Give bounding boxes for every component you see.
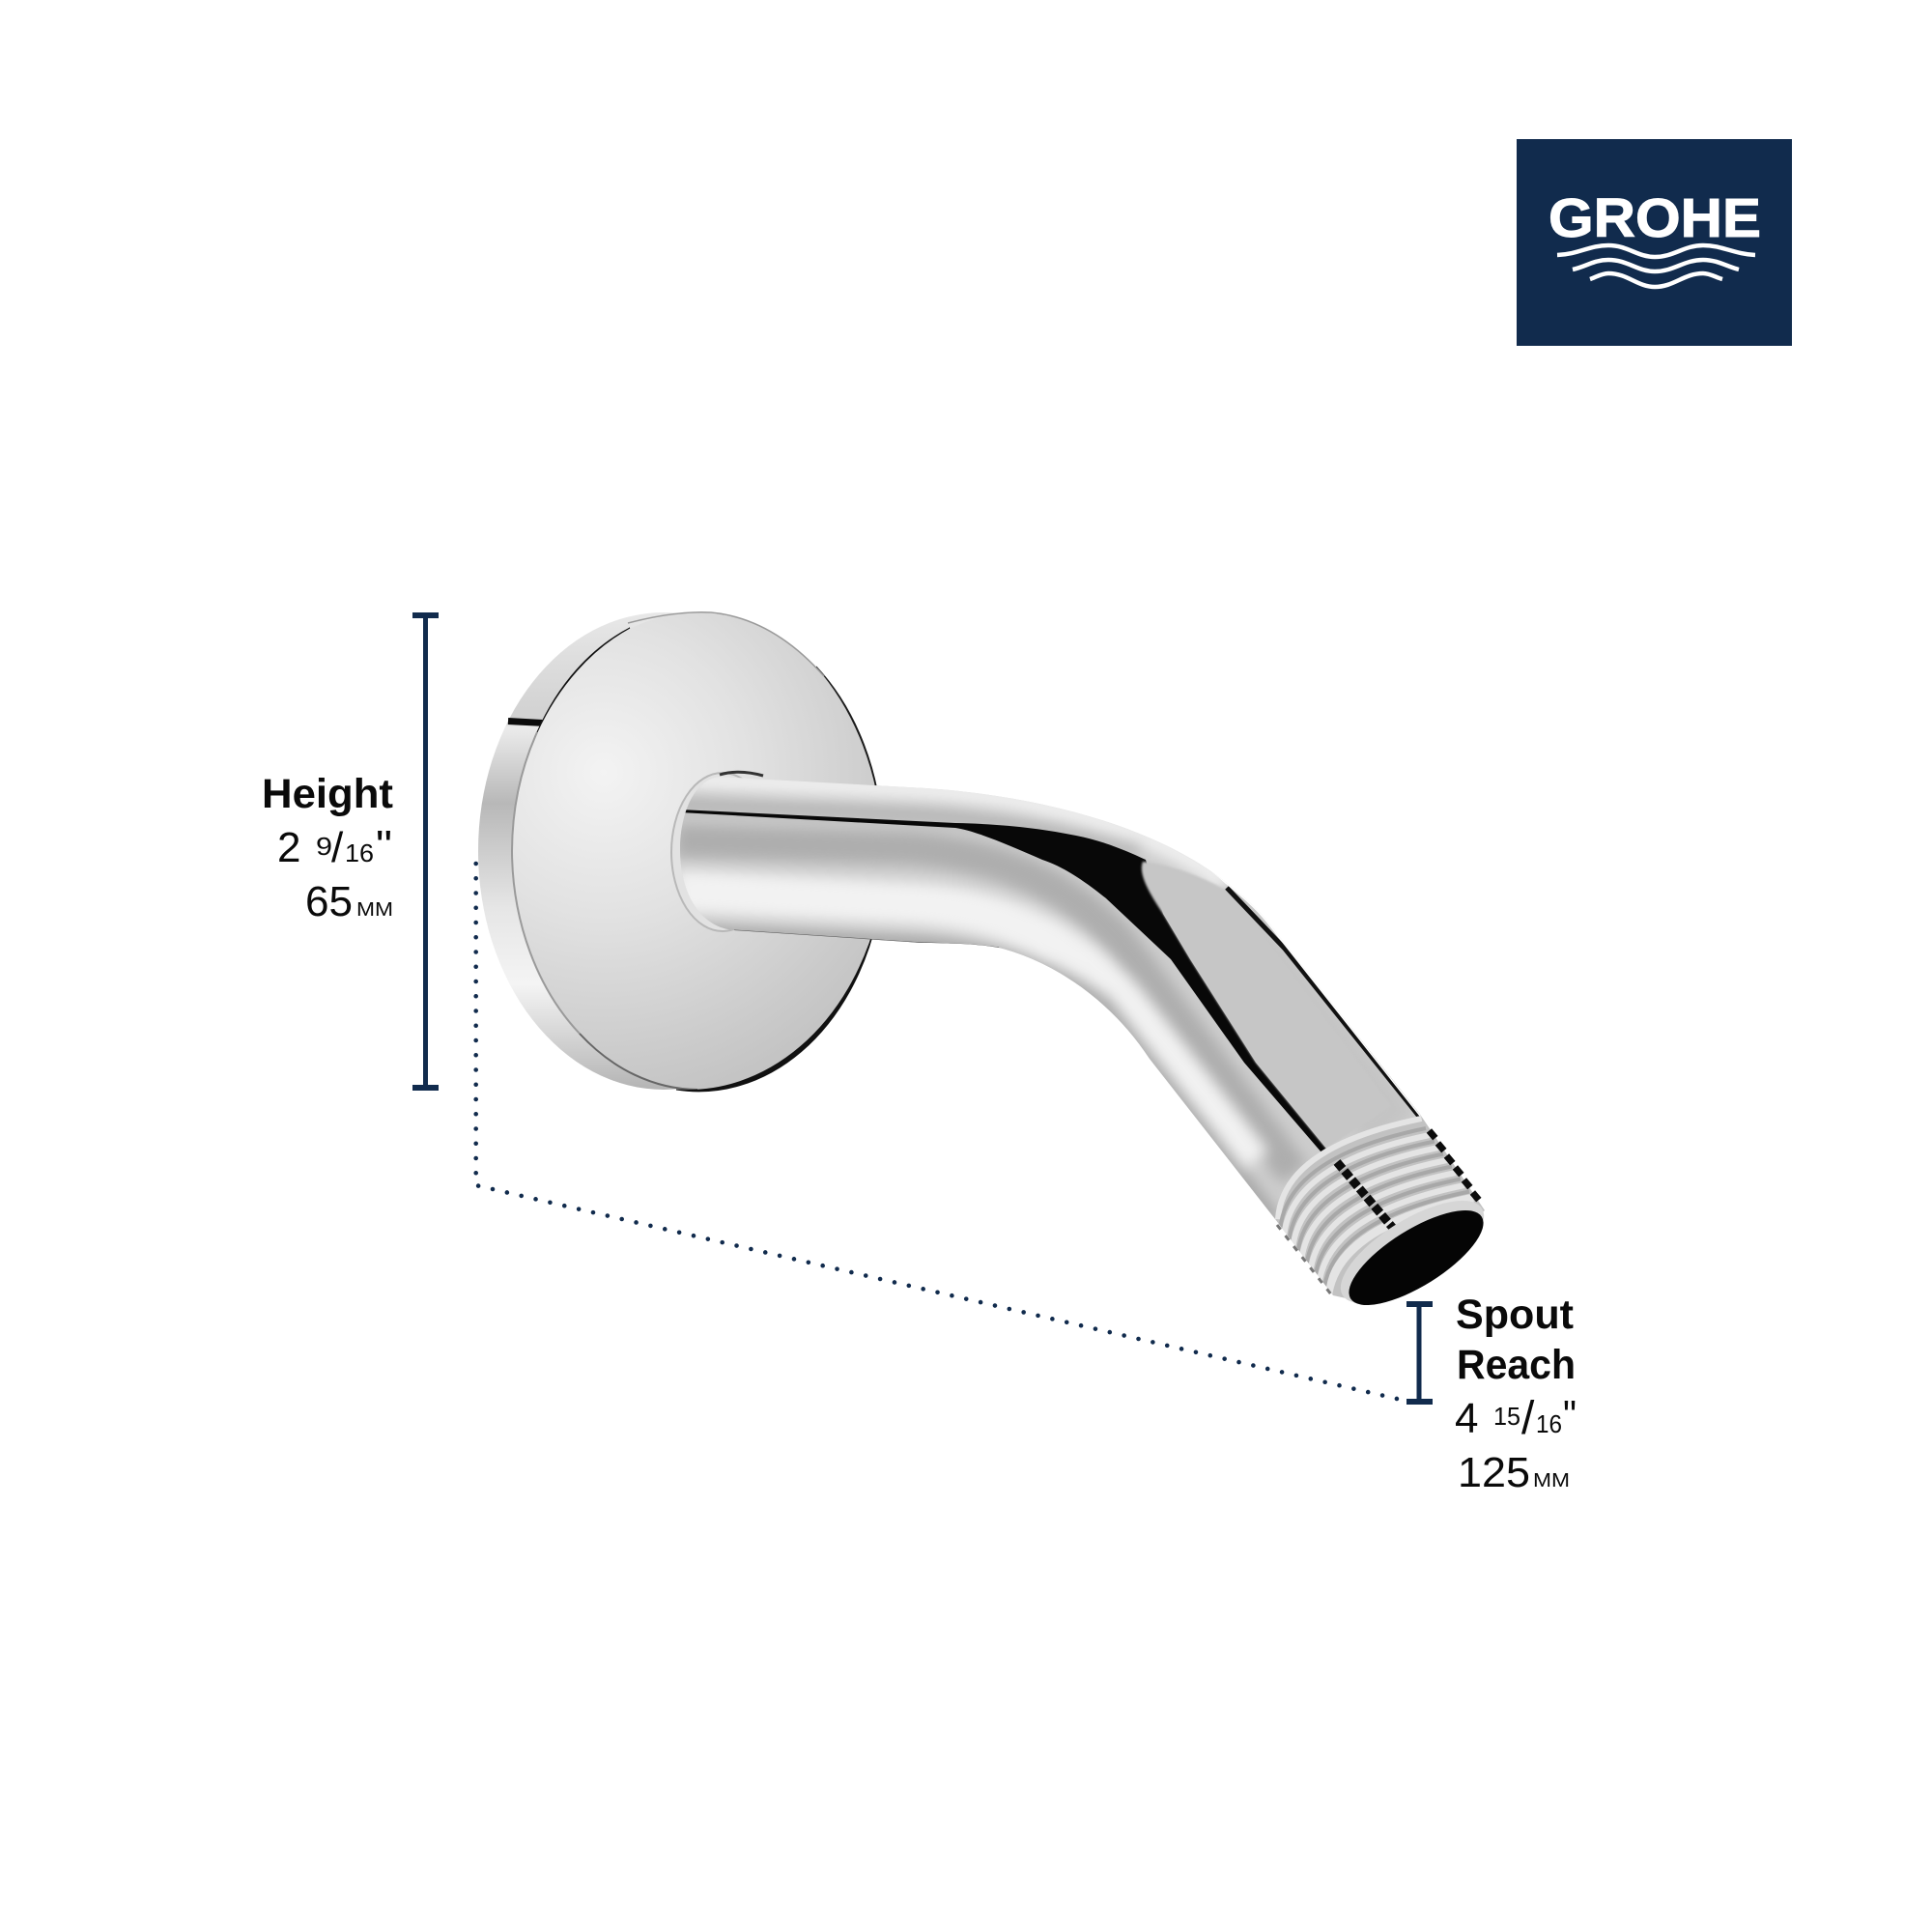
flange rim bbox=[478, 612, 849, 1090]
label: height: 2 bbox=[277, 824, 300, 871]
label: spout reach: 15 bbox=[1493, 1402, 1520, 1431]
label: spout reach: Spout bbox=[1456, 1292, 1574, 1338]
label: spout reach: MM bbox=[1533, 1470, 1570, 1492]
product: shower arm bbox=[478, 612, 1499, 1322]
flange hole ring bbox=[671, 772, 774, 931]
label: height: 9 bbox=[316, 832, 332, 861]
logo: GROHE: GROHE bbox=[1548, 187, 1761, 249]
label: spout reach: " bbox=[1563, 1392, 1577, 1439]
threaded end bbox=[1275, 1116, 1485, 1305]
label: spout reach: / bbox=[1521, 1393, 1535, 1444]
flange face bbox=[512, 612, 883, 1092]
arm reflection: grey lozenge bbox=[1140, 860, 1325, 1150]
label: height: Height bbox=[262, 771, 393, 817]
dotted spout reach line bbox=[476, 864, 1397, 1399]
arm reflection: black band bbox=[680, 810, 1326, 1152]
label: spout reach: Reach bbox=[1457, 1342, 1576, 1388]
label: spout reach: 16 bbox=[1536, 1409, 1562, 1438]
label: spout reach: 4 bbox=[1455, 1395, 1478, 1442]
dimension: spout reach bracket bbox=[1406, 1301, 1433, 1405]
label: height: 65 bbox=[305, 878, 353, 925]
dimension: height bracket bbox=[412, 612, 439, 1091]
logo: GROHE bbox=[1517, 139, 1792, 346]
thread notches bbox=[1427, 1128, 1482, 1202]
label: spout reach: 125 bbox=[1458, 1449, 1530, 1496]
label: spout reach bbox=[1455, 1292, 1577, 1496]
label: height: MM bbox=[356, 899, 393, 921]
infographic canvas bbox=[265, 139, 1792, 1488]
label: height: / bbox=[331, 824, 344, 871]
label: height: 16 bbox=[345, 838, 374, 867]
arm reflection: right dark strip bbox=[1227, 888, 1421, 1119]
arm tube bbox=[680, 778, 1421, 1219]
pipe end opening bbox=[1325, 1181, 1499, 1322]
thread black strip bbox=[1337, 1162, 1397, 1233]
label: height bbox=[262, 771, 393, 925]
label: height: " bbox=[376, 822, 392, 869]
